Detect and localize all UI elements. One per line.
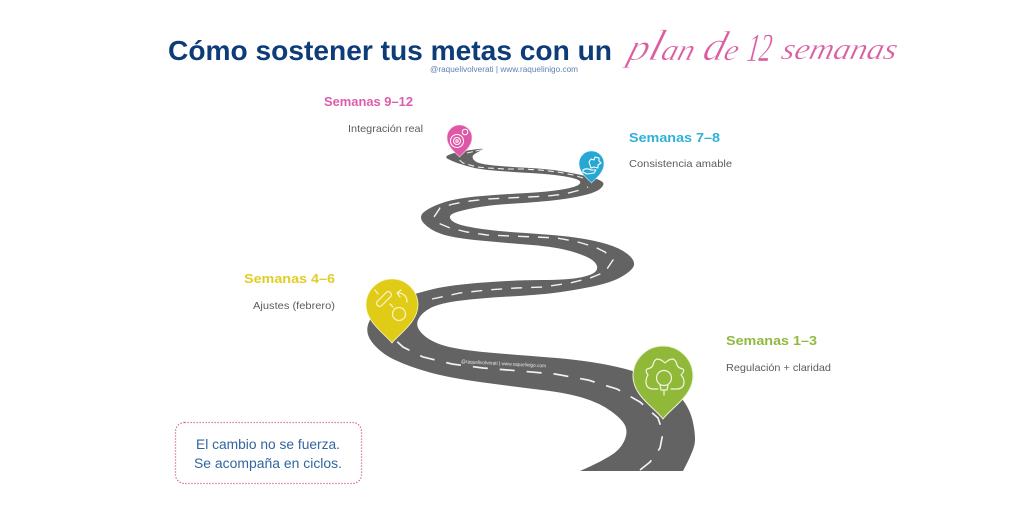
- pin: semanas 9-12: [447, 125, 472, 157]
- pin: semanas 1-3: [633, 346, 693, 419]
- title: [168, 21, 902, 70]
- callout: El cambio no se fuerza.: [196, 437, 340, 452]
- title: Cómo sostener tus metas con un: [168, 35, 612, 66]
- callout: Se acompaña en ciclos.: [194, 456, 342, 471]
- label: semanas 7-8: Consistencia amable: [629, 158, 732, 170]
- label: semanas 7-8: [629, 130, 732, 170]
- pin: semanas 4-6: [366, 279, 418, 343]
- title: de: [698, 24, 746, 70]
- label: semanas 1-3: [726, 333, 831, 374]
- label: semanas 7-8: Semanas 7–8: [629, 130, 720, 145]
- label: semanas 1-3: Semanas 1–3: [726, 333, 817, 348]
- label: semanas 9-12: Integración real: [348, 123, 423, 135]
- road watermark: @raquelivolverati | www.raquelinigo.com: [461, 359, 546, 369]
- title: plan: [620, 21, 703, 70]
- label: semanas 1-3: Regulación + claridad: [726, 362, 831, 374]
- winding road: [367, 149, 700, 477]
- callout: [176, 422, 362, 484]
- label: semanas 4-6: Semanas 4–6: [244, 271, 335, 286]
- label: semanas 4-6: Ajustes (febrero): [253, 300, 335, 312]
- title: semanas: [778, 32, 902, 66]
- label: semanas 9-12: Semanas 9–12: [324, 94, 413, 109]
- label: semanas 9-12: [324, 94, 423, 135]
- pin: semanas 7-8: [579, 151, 604, 183]
- title: 12: [745, 25, 775, 70]
- credit line: @raquelivolverati | www.raquelinigo.com: [430, 65, 578, 74]
- label: semanas 4-6: [244, 271, 335, 312]
